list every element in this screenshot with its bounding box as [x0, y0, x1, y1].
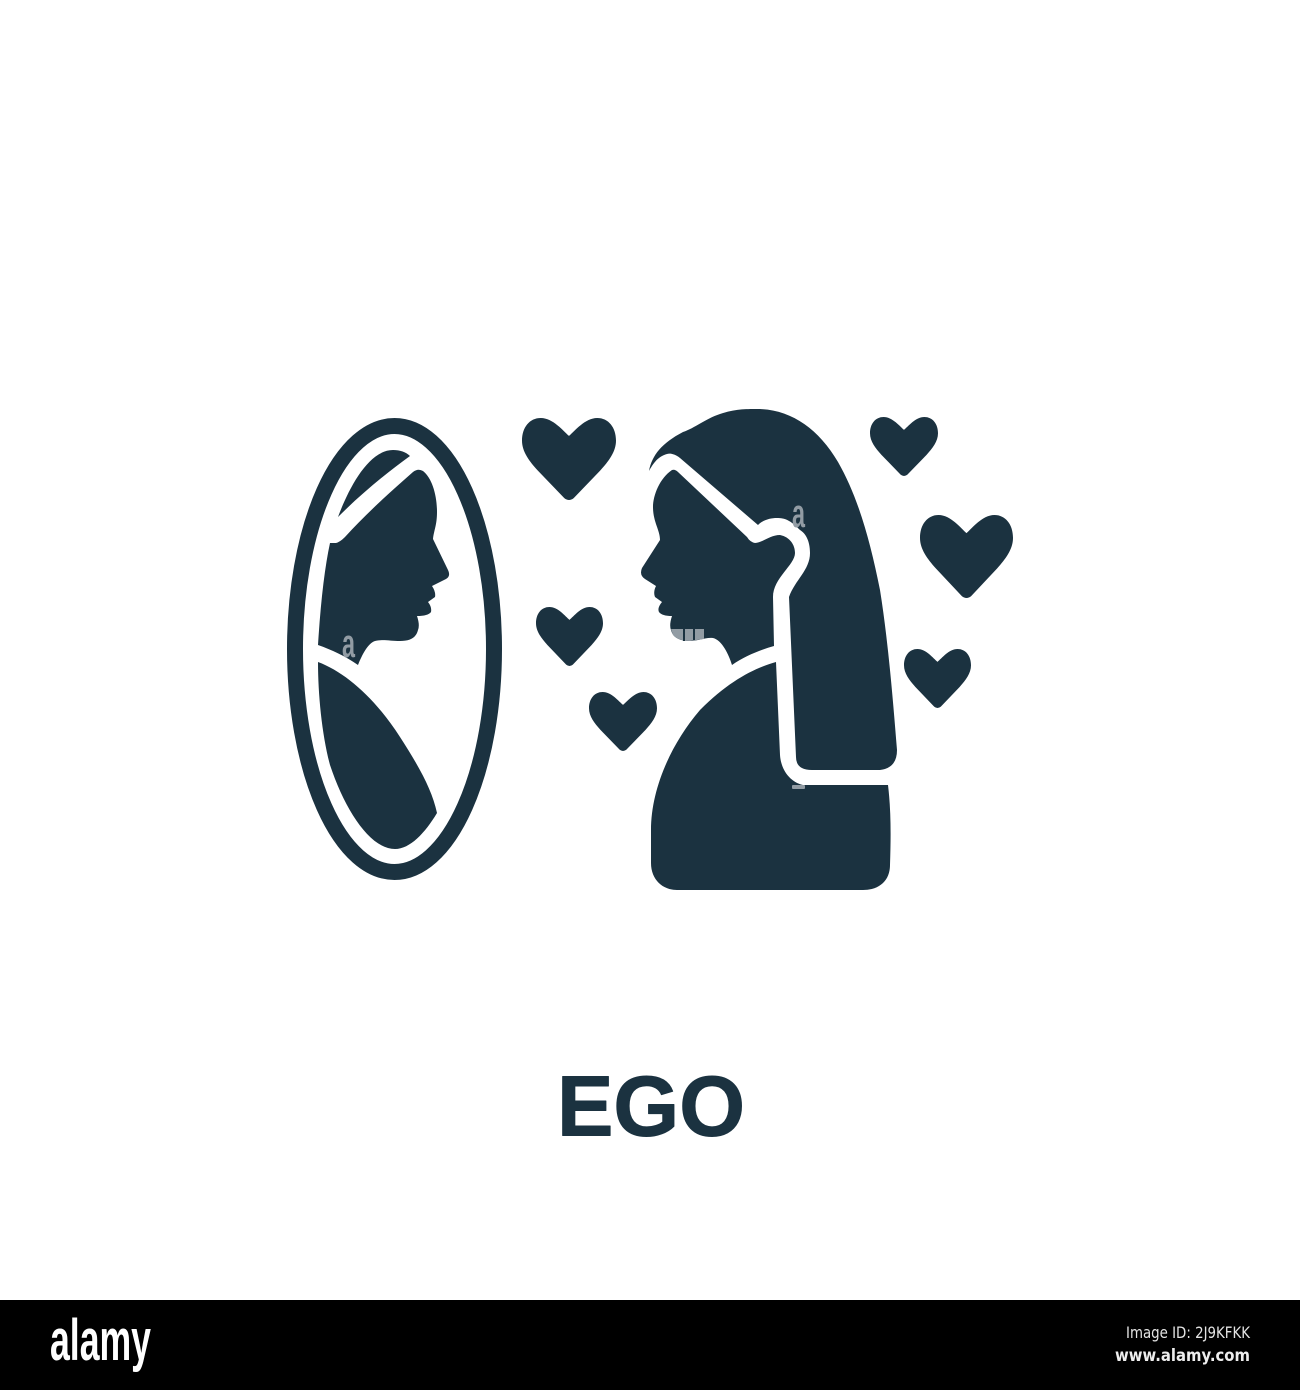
footer logo: alamy: [50, 1308, 151, 1373]
icon: heart middle right: [920, 515, 1013, 598]
icon: heart top right: [870, 417, 938, 476]
icon: ego illustration: [295, 409, 1013, 890]
icon: heart centre bottom: [589, 692, 657, 751]
icon: heart top left: [522, 418, 616, 500]
title: EGO: [557, 1060, 745, 1154]
icon: oval mirror with reflection: [295, 426, 494, 872]
watermark fragments over the icon: [342, 492, 805, 789]
image id: Image ID: 2J9KFKK: [1126, 1323, 1250, 1342]
website: www.alamy.com: [1115, 1346, 1250, 1366]
footer bar: [0, 1300, 1300, 1390]
watermark fragments over the icon: a: [342, 622, 355, 666]
icon: heart lower right: [904, 649, 971, 708]
icon: woman silhouette: [641, 409, 897, 890]
watermark fragments over the icon: a: [792, 492, 805, 536]
icon: heart centre left: [536, 607, 603, 666]
